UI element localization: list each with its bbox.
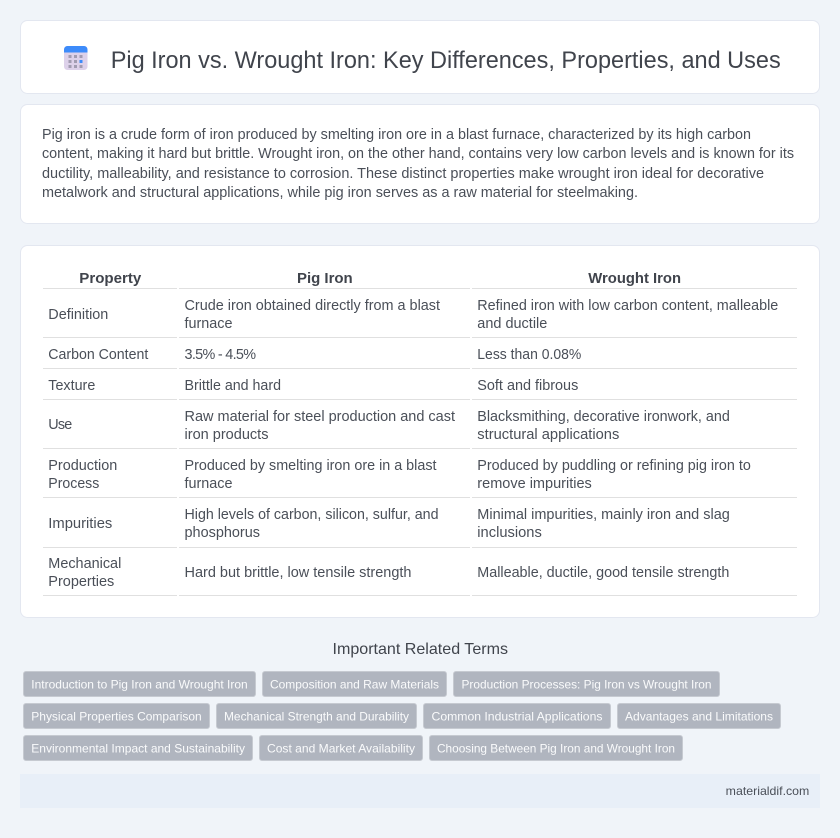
row: carbon content: Less than 0.08% (477, 347, 581, 363)
related terms tags (24, 672, 780, 760)
tag (262, 672, 446, 696)
tag (430, 736, 682, 760)
tag (24, 704, 210, 728)
header panel (20, 20, 820, 94)
intro text panel (20, 104, 820, 224)
row: definition: furnace (184, 316, 232, 332)
row: mechanical properties (48, 556, 729, 590)
intro paragraph: metalwork and structural applications, while pig iron serves as a raw material for steelmaking. (42, 185, 638, 201)
row: texture (48, 378, 578, 394)
row: production process: Process (48, 476, 99, 492)
tag (424, 704, 610, 728)
tag (260, 736, 422, 760)
tag: Advantages and Limitations (625, 709, 773, 723)
title: Pig Iron vs. Wrought Iron: Key Differences, Properties, and Uses (111, 47, 781, 74)
row: impurities: Impurities (48, 516, 112, 532)
row: use: Use (48, 417, 72, 433)
row: definition: Refined iron with low carbon content, malleable (477, 298, 778, 314)
row: production process: Production (48, 458, 117, 474)
row: impurities: inclusions (477, 525, 542, 541)
row: impurities: High levels of carbon, silicon, sulfur, and (184, 507, 438, 523)
related terms heading: Important Related Terms (332, 641, 508, 658)
footer bar: materialdif.com (726, 784, 809, 798)
tag: Cost and Market Availability (267, 741, 415, 755)
row: carbon content: Carbon Content (48, 347, 148, 363)
table header row: Wrought Iron (588, 270, 681, 287)
intro paragraph (42, 127, 794, 201)
tag (216, 704, 416, 728)
intro paragraph: Pig iron is a crude form of iron produced by smelting iron ore in a blast furnace, characterized by its high carbon (42, 127, 751, 143)
row: mechanical properties: Mechanical (48, 556, 121, 572)
row: production process: Produced by puddling or refining pig iron to (477, 458, 751, 474)
tag: Introduction to Pig Iron and Wrought Iron (31, 677, 248, 691)
tag: Composition and Raw Materials (270, 677, 439, 691)
row: use: Raw material for steel production and cast (184, 409, 455, 425)
row: production process (48, 458, 751, 492)
table header row: Property (79, 270, 142, 287)
row: texture: Brittle and hard (184, 378, 281, 394)
tag: Environmental Impact and Sustainability (31, 741, 245, 755)
tag: Production Processes: Pig Iron vs Wrought Iron (462, 677, 712, 691)
row: use: Blacksmithing, decorative ironwork, and (477, 409, 730, 425)
tag: Physical Properties Comparison (31, 709, 202, 723)
row: impurities: Minimal impurities, mainly iron and slag (477, 507, 730, 523)
tag (24, 672, 256, 696)
tag: Choosing Between Pig Iron and Wrought Iron (437, 741, 675, 755)
row: mechanical properties: Properties (48, 574, 114, 590)
tag: Common Industrial Applications (432, 709, 602, 723)
row: carbon content: 3.5% - 4.5% (184, 347, 256, 363)
row: definition: Definition (48, 307, 108, 323)
row: impurities: phosphorus (184, 525, 260, 541)
tag: Mechanical Strength and Durability (224, 709, 409, 723)
row: mechanical properties: Hard but brittle, low tensile strength (184, 565, 412, 581)
row: production process: furnace (184, 476, 232, 492)
row: use: structural applications (477, 427, 619, 443)
row: definition: and ductile (477, 316, 547, 332)
row: use: iron products (184, 427, 268, 443)
row: production process: Produced by smelting iron ore in a blast (184, 458, 436, 474)
row: texture: Soft and fibrous (477, 378, 578, 394)
intro paragraph: content, making it hard but brittle. Wrought iron, on the other hand, contains very low carbon levels and is known for its (42, 146, 794, 162)
row: definition: Crude iron obtained directly from a blast (184, 298, 440, 314)
row: carbon content (48, 347, 581, 363)
tag (454, 672, 720, 696)
intro paragraph: ductility, malleability, and resistance to corrosion. These distinct properties make wrought iron ideal for decorative (42, 166, 764, 182)
tag (24, 736, 252, 760)
row: use (48, 409, 730, 443)
row: definition (48, 298, 778, 332)
row: impurities (48, 507, 730, 541)
row: texture: Texture (48, 378, 95, 394)
row: production process: remove impurities (477, 476, 592, 492)
table header row: Pig Iron (297, 270, 353, 287)
footer bar (20, 774, 820, 808)
icon: calendar grid (64, 46, 88, 70)
comparison table panel (20, 246, 820, 618)
table header row (79, 270, 681, 287)
row: mechanical properties: Malleable, ductile, good tensile strength (477, 565, 729, 581)
tag (618, 704, 780, 728)
